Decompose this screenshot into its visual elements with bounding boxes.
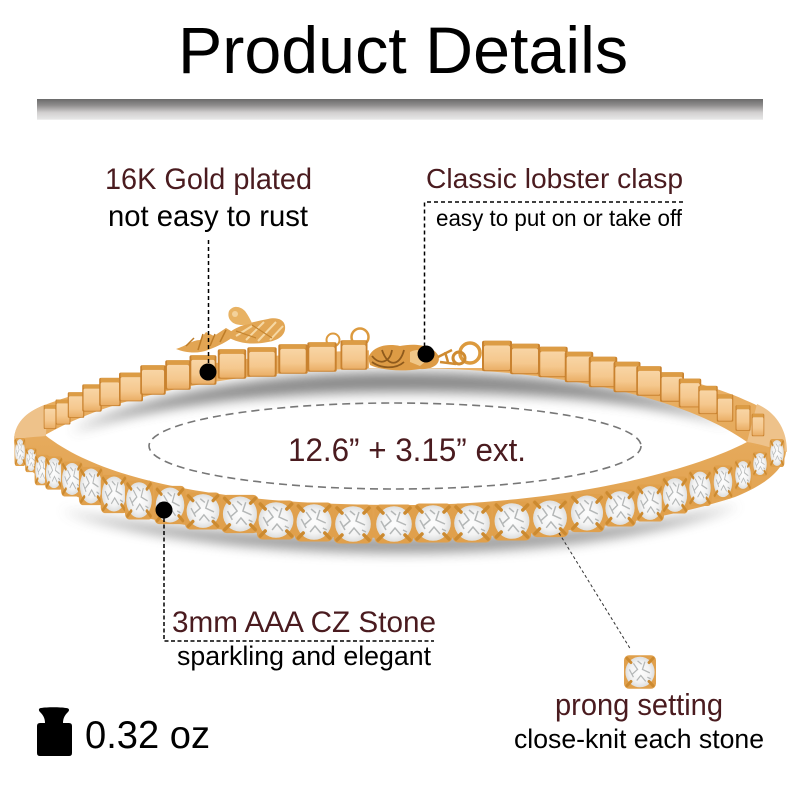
clasp gap [369, 330, 483, 368]
callout: gold plated [105, 163, 312, 380]
extender chain with drop [176, 307, 285, 353]
right tip highlight [747, 404, 787, 452]
gold links [44, 340, 764, 436]
weight text: 0.32 oz [85, 714, 210, 757]
weight [37, 707, 210, 757]
lobster clasp and rings [326, 328, 480, 370]
crystal stones [15, 438, 784, 544]
bracelet [14, 307, 787, 553]
header bar [37, 99, 763, 120]
bracelet band [14, 350, 786, 538]
callout: lobster clasp [418, 163, 683, 362]
icon: single stone [624, 655, 656, 689]
bracelet shadows [60, 372, 740, 553]
size text: 12.6” + 3.15” ext. [288, 432, 526, 468]
size ellipse callout [149, 403, 641, 489]
callout: lobster clasp: Classic lobster clasp [426, 163, 683, 194]
callout: lobster clasp: easy to put on or take off [436, 205, 683, 231]
callout: prong setting: prong setting [555, 687, 723, 722]
callout: gold plated: 16K Gold plated [105, 163, 312, 196]
callout: gold plated: not easy to rust [108, 200, 309, 233]
callout: prong setting [514, 533, 764, 754]
callout: prong setting: close-knit each stone [514, 724, 764, 754]
title: Product Details [178, 13, 628, 87]
callout: CZ stone: sparkling and elegant [177, 641, 431, 671]
left tip highlight [14, 404, 47, 440]
callout: CZ stone: 3mm AAA CZ Stone [172, 606, 436, 639]
callout: CZ stone [156, 502, 436, 671]
icon: weight [37, 707, 72, 756]
